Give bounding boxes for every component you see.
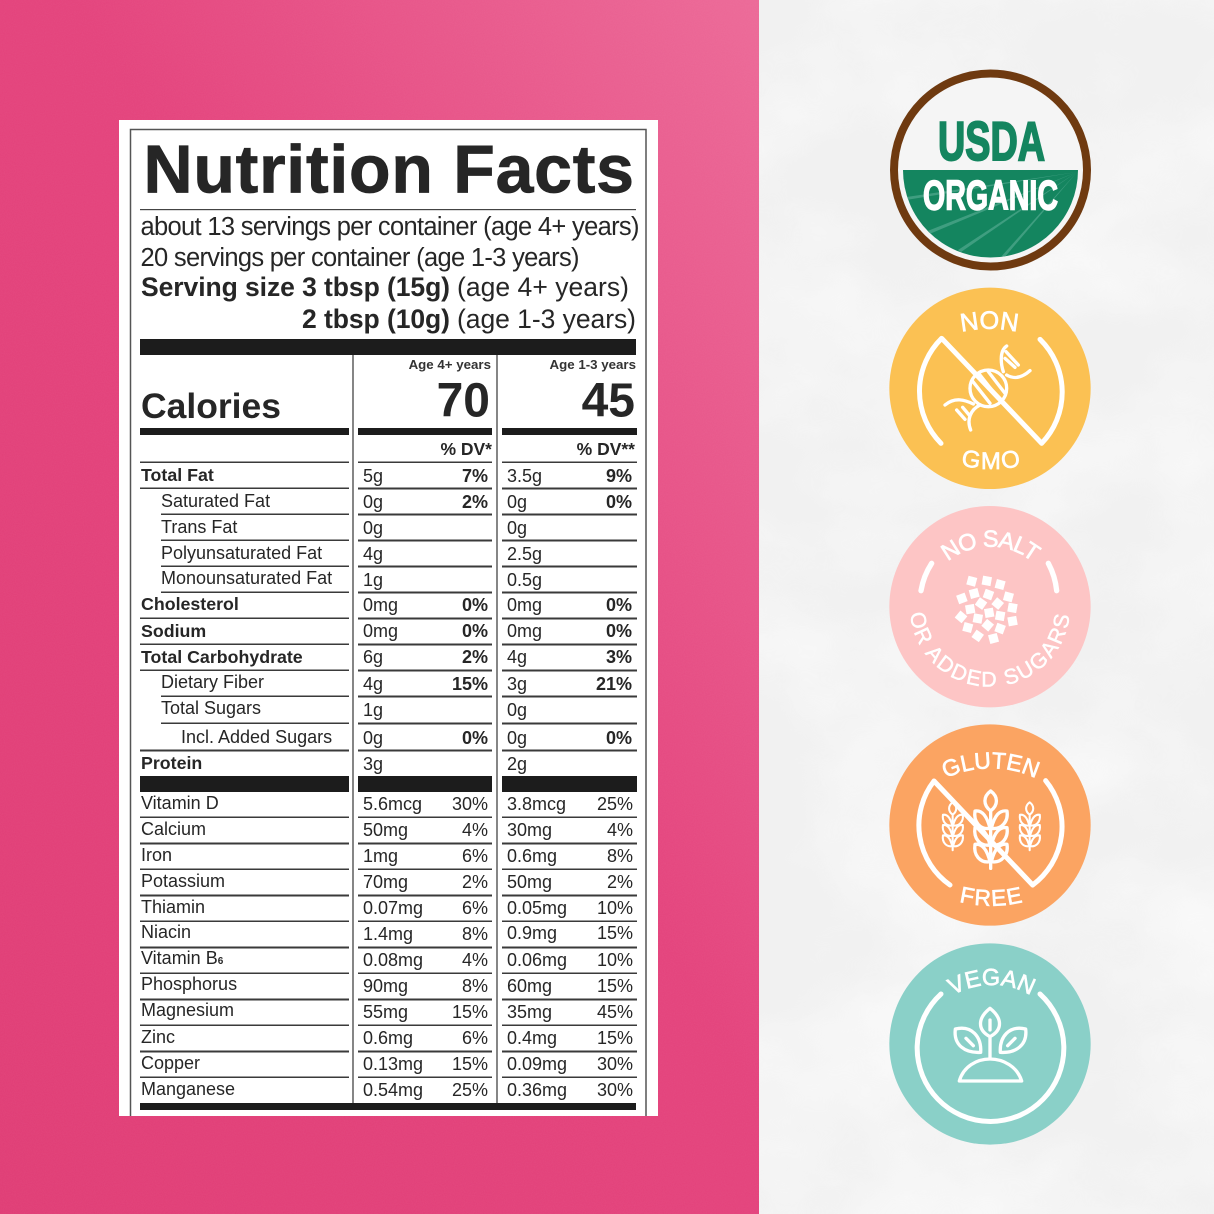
table rules — [140, 462, 637, 1110]
row: total carbohydrate: 4g — [507, 647, 527, 667]
row: polyunsaturated fat: 2.5g — [507, 544, 542, 564]
row: sodium: 0mg — [363, 621, 398, 641]
calories value age 1-3: 45 — [582, 374, 635, 428]
text block: servings per container: 20 servings per container (age 1-3 years) — [140, 244, 580, 272]
row: saturated fat — [161, 491, 632, 512]
badge: no salt or added sugars: OR ADDED SUGARS — [910, 612, 1070, 687]
row: calcium: 30mg — [507, 820, 552, 840]
row: total sugars — [161, 698, 527, 720]
panel: marble background — [759, 0, 1214, 1214]
row: saturated fat: 0g — [363, 492, 383, 512]
row: trans fat: 0g — [507, 518, 527, 538]
row: potassium: 2% — [462, 872, 488, 892]
row: magnesium: 15% — [452, 1002, 488, 1022]
row: total carbohydrate — [141, 647, 632, 667]
row: sodium — [141, 621, 632, 641]
row: vitamin d: 3.8mcg — [507, 794, 566, 814]
row: copper: 0.13mg — [363, 1054, 423, 1074]
row: polyunsaturated fat — [161, 543, 542, 564]
row: cholesterol: 0mg — [363, 595, 398, 615]
row: calcium — [141, 819, 633, 840]
row: vitamin d — [141, 793, 633, 814]
row: cholesterol: 0% — [606, 595, 632, 615]
icon: crossed ring — [919, 781, 1062, 885]
row: phosphorus: Phosphorus — [141, 974, 237, 994]
row: total fat: 3.5g — [507, 466, 542, 486]
text block: servings per container: about 13 servings per container (age 4+ years) — [140, 213, 640, 241]
row: dietary fiber — [161, 672, 632, 694]
row: copper: Copper — [141, 1053, 200, 1073]
badge: gluten free — [889, 724, 1091, 926]
row: dietary fiber: 4g — [363, 674, 383, 694]
row: protein — [141, 753, 527, 774]
row: added sugars: 0% — [462, 728, 488, 748]
row: manganese: 30% — [597, 1080, 633, 1100]
row: manganese: 25% — [452, 1080, 488, 1100]
text block: serving size: Serving size 3 tbsp (15g) — [141, 272, 450, 302]
row: iron: 1mg — [363, 846, 398, 866]
row: vitamin b6: 0.06mg — [507, 950, 567, 970]
row: protein: 3g — [363, 754, 383, 774]
row: iron: 6% — [462, 846, 488, 866]
row: zinc: 0.6mg — [363, 1028, 413, 1048]
icon: DNA helix — [945, 346, 1030, 430]
row: sodium: 0% — [462, 621, 488, 641]
row: magnesium: 45% — [597, 1002, 633, 1022]
row: potassium: 2% — [607, 872, 633, 892]
panel: pink background — [0, 0, 759, 1214]
row: thiamin: 10% — [597, 898, 633, 918]
percent daily value headers: % DV* — [440, 439, 492, 459]
row: thiamin: 0.05mg — [507, 898, 567, 918]
badge: non GMO: NON — [960, 310, 1018, 332]
text block: servings per container — [140, 213, 640, 272]
row: zinc: 6% — [462, 1028, 488, 1048]
row: vitamin b6: 0.08mg — [363, 950, 423, 970]
row: potassium: 70mg — [363, 872, 408, 892]
row: potassium: 50mg — [507, 872, 552, 892]
row: cholesterol: 0% — [462, 595, 488, 615]
row: total sugars: 1g — [363, 700, 383, 720]
row: niacin: 1.4mg — [363, 924, 413, 944]
row: zinc — [141, 1027, 633, 1048]
row: zinc: 0.4mg — [507, 1028, 557, 1048]
row: protein: 2g — [507, 754, 527, 774]
row: total carbohydrate: Total Carbohydrate — [141, 647, 303, 667]
row: magnesium: 55mg — [363, 1002, 408, 1022]
row: sodium: 0mg — [507, 621, 542, 641]
row: thiamin: 0.07mg — [363, 898, 423, 918]
row: phosphorus: 15% — [597, 976, 633, 996]
row: phosphorus: 8% — [462, 976, 488, 996]
row: calcium: 4% — [607, 820, 633, 840]
row: total fat: 9% — [606, 466, 632, 486]
row: vitamin d: 25% — [597, 794, 633, 814]
row: manganese: 0.54mg — [363, 1080, 423, 1100]
row: added sugars: Incl. Added Sugars — [181, 727, 332, 747]
text block: serving size: 2 tbsp (10g) — [302, 304, 450, 334]
badge: gluten free: GLUTEN — [942, 752, 1040, 778]
row: total carbohydrate: 3% — [606, 647, 632, 667]
badge: non GMO — [889, 288, 1091, 489]
icon: sprout — [955, 1008, 1026, 1081]
row: iron: 0.6mg — [507, 846, 557, 866]
text block: serving size: (age 4+ years) — [457, 272, 629, 302]
row: manganese — [141, 1079, 633, 1100]
row: manganese: 0.36mg — [507, 1080, 567, 1100]
row: manganese: Manganese — [141, 1079, 235, 1099]
row: total fat: 5g — [363, 466, 383, 486]
row: potassium — [141, 871, 633, 892]
row: polyunsaturated fat: 4g — [363, 544, 383, 564]
row: trans fat: Trans Fat — [161, 517, 237, 537]
title: Nutrition Facts — [144, 132, 634, 208]
row: copper: 0.09mg — [507, 1054, 567, 1074]
column header: age 1-3 years: Age 1-3 years — [550, 357, 636, 372]
row: vitamin d: 5.6mcg — [363, 794, 422, 814]
badge: USDA organic: ORGANIC — [923, 172, 1058, 218]
row: saturated fat: 0g — [507, 492, 527, 512]
row: dietary fiber: 3g — [507, 674, 527, 694]
row: vitamin b6 — [141, 948, 633, 970]
row: trans fat: 0g — [363, 518, 383, 538]
panel: nutrition facts label — [119, 120, 658, 1116]
row: total carbohydrate: 2% — [462, 647, 488, 667]
row: added sugars — [181, 727, 632, 748]
icon: wheat center — [975, 791, 1007, 868]
row: vitamin b6: Vitamin B6 — [141, 948, 224, 968]
row: added sugars: 0g — [363, 728, 383, 748]
row: phosphorus — [141, 974, 633, 996]
row: protein: Protein — [141, 753, 202, 773]
row: phosphorus: 90mg — [363, 976, 408, 996]
row: polyunsaturated fat: Polyunsaturated Fat — [161, 543, 322, 563]
row: total sugars: Total Sugars — [161, 698, 261, 718]
row: total fat: Total Fat — [141, 465, 214, 485]
row: copper — [141, 1053, 633, 1074]
text block: serving size — [141, 272, 636, 334]
icon: sugar cubes — [955, 576, 1018, 644]
row: copper: 15% — [452, 1054, 488, 1074]
row: monounsaturated fat: 0.5g — [507, 570, 542, 590]
text block: serving size: (age 1-3 years) — [457, 304, 636, 334]
badge: no salt or added sugars: NO SALT — [940, 530, 1042, 560]
row: zinc: 15% — [597, 1028, 633, 1048]
row: vitamin d: 30% — [452, 794, 488, 814]
row: potassium: Potassium — [141, 871, 225, 891]
row: sodium: Sodium — [141, 621, 206, 641]
row: vitamin d: Vitamin D — [141, 793, 219, 813]
row: monounsaturated fat: 1g — [363, 570, 383, 590]
row: monounsaturated fat: Monounsaturated Fat — [161, 568, 332, 588]
row: magnesium: 35mg — [507, 1002, 552, 1022]
percent daily value headers — [440, 439, 635, 459]
calories label: Calories — [141, 387, 281, 426]
row: dietary fiber: Dietary Fiber — [161, 672, 264, 692]
row: total sugars: 0g — [507, 700, 527, 720]
column header: age 4+ years: Age 4+ years — [409, 357, 491, 372]
row: monounsaturated fat — [161, 568, 542, 590]
row: cholesterol: Cholesterol — [141, 594, 239, 614]
badge: no salt or added sugars — [889, 506, 1091, 708]
row: niacin: Niacin — [141, 922, 191, 942]
row: copper: 30% — [597, 1054, 633, 1074]
row: saturated fat: Saturated Fat — [161, 491, 270, 511]
row: calcium: 4% — [462, 820, 488, 840]
row: iron: 8% — [607, 846, 633, 866]
row: magnesium: Magnesium — [141, 1000, 234, 1020]
badge: USDA organic: USDA — [938, 110, 1045, 172]
row: niacin: 8% — [462, 924, 488, 944]
row: dietary fiber: 21% — [596, 674, 632, 694]
row: saturated fat: 0% — [606, 492, 632, 512]
row: phosphorus: 60mg — [507, 976, 552, 996]
icon: wheat right — [1020, 802, 1040, 850]
row: vitamin b6: 10% — [597, 950, 633, 970]
row: sodium: 0% — [606, 621, 632, 641]
row: thiamin — [141, 897, 633, 918]
row: iron — [141, 845, 633, 866]
icon: wheat left — [943, 802, 963, 850]
row: added sugars: 0g — [507, 728, 527, 748]
row: calcium: 50mg — [363, 820, 408, 840]
badge: non GMO: GMO — [962, 450, 1019, 470]
row: iron: Iron — [141, 845, 172, 865]
percent daily value headers: % DV** — [577, 439, 635, 459]
row: cholesterol: 0mg — [507, 595, 542, 615]
row: niacin: 0.9mg — [507, 923, 557, 943]
row: total carbohydrate: 6g — [363, 647, 383, 667]
row: thiamin: Thiamin — [141, 897, 205, 917]
badge: vegan: VEGAN — [946, 968, 1036, 995]
row: zinc: Zinc — [141, 1027, 175, 1047]
row: thiamin: 6% — [462, 898, 488, 918]
row: added sugars: 0% — [606, 728, 632, 748]
row: dietary fiber: 15% — [452, 674, 488, 694]
row: trans fat — [161, 517, 527, 538]
row: magnesium — [141, 1000, 633, 1022]
calories value age 4+: 70 — [437, 374, 490, 428]
row: niacin — [141, 922, 633, 944]
row: calcium: Calcium — [141, 819, 206, 839]
icon: crossed ring — [919, 338, 1062, 443]
badge: USDA organic — [894, 74, 1087, 266]
row: cholesterol — [141, 594, 632, 615]
row: saturated fat: 2% — [462, 492, 488, 512]
row: total fat — [141, 465, 632, 486]
badge: gluten free: FREE — [960, 886, 1022, 906]
row: total fat: 7% — [462, 466, 488, 486]
badge: vegan — [889, 943, 1091, 1145]
row: niacin: 15% — [597, 923, 633, 943]
row: vitamin b6: 4% — [462, 950, 488, 970]
